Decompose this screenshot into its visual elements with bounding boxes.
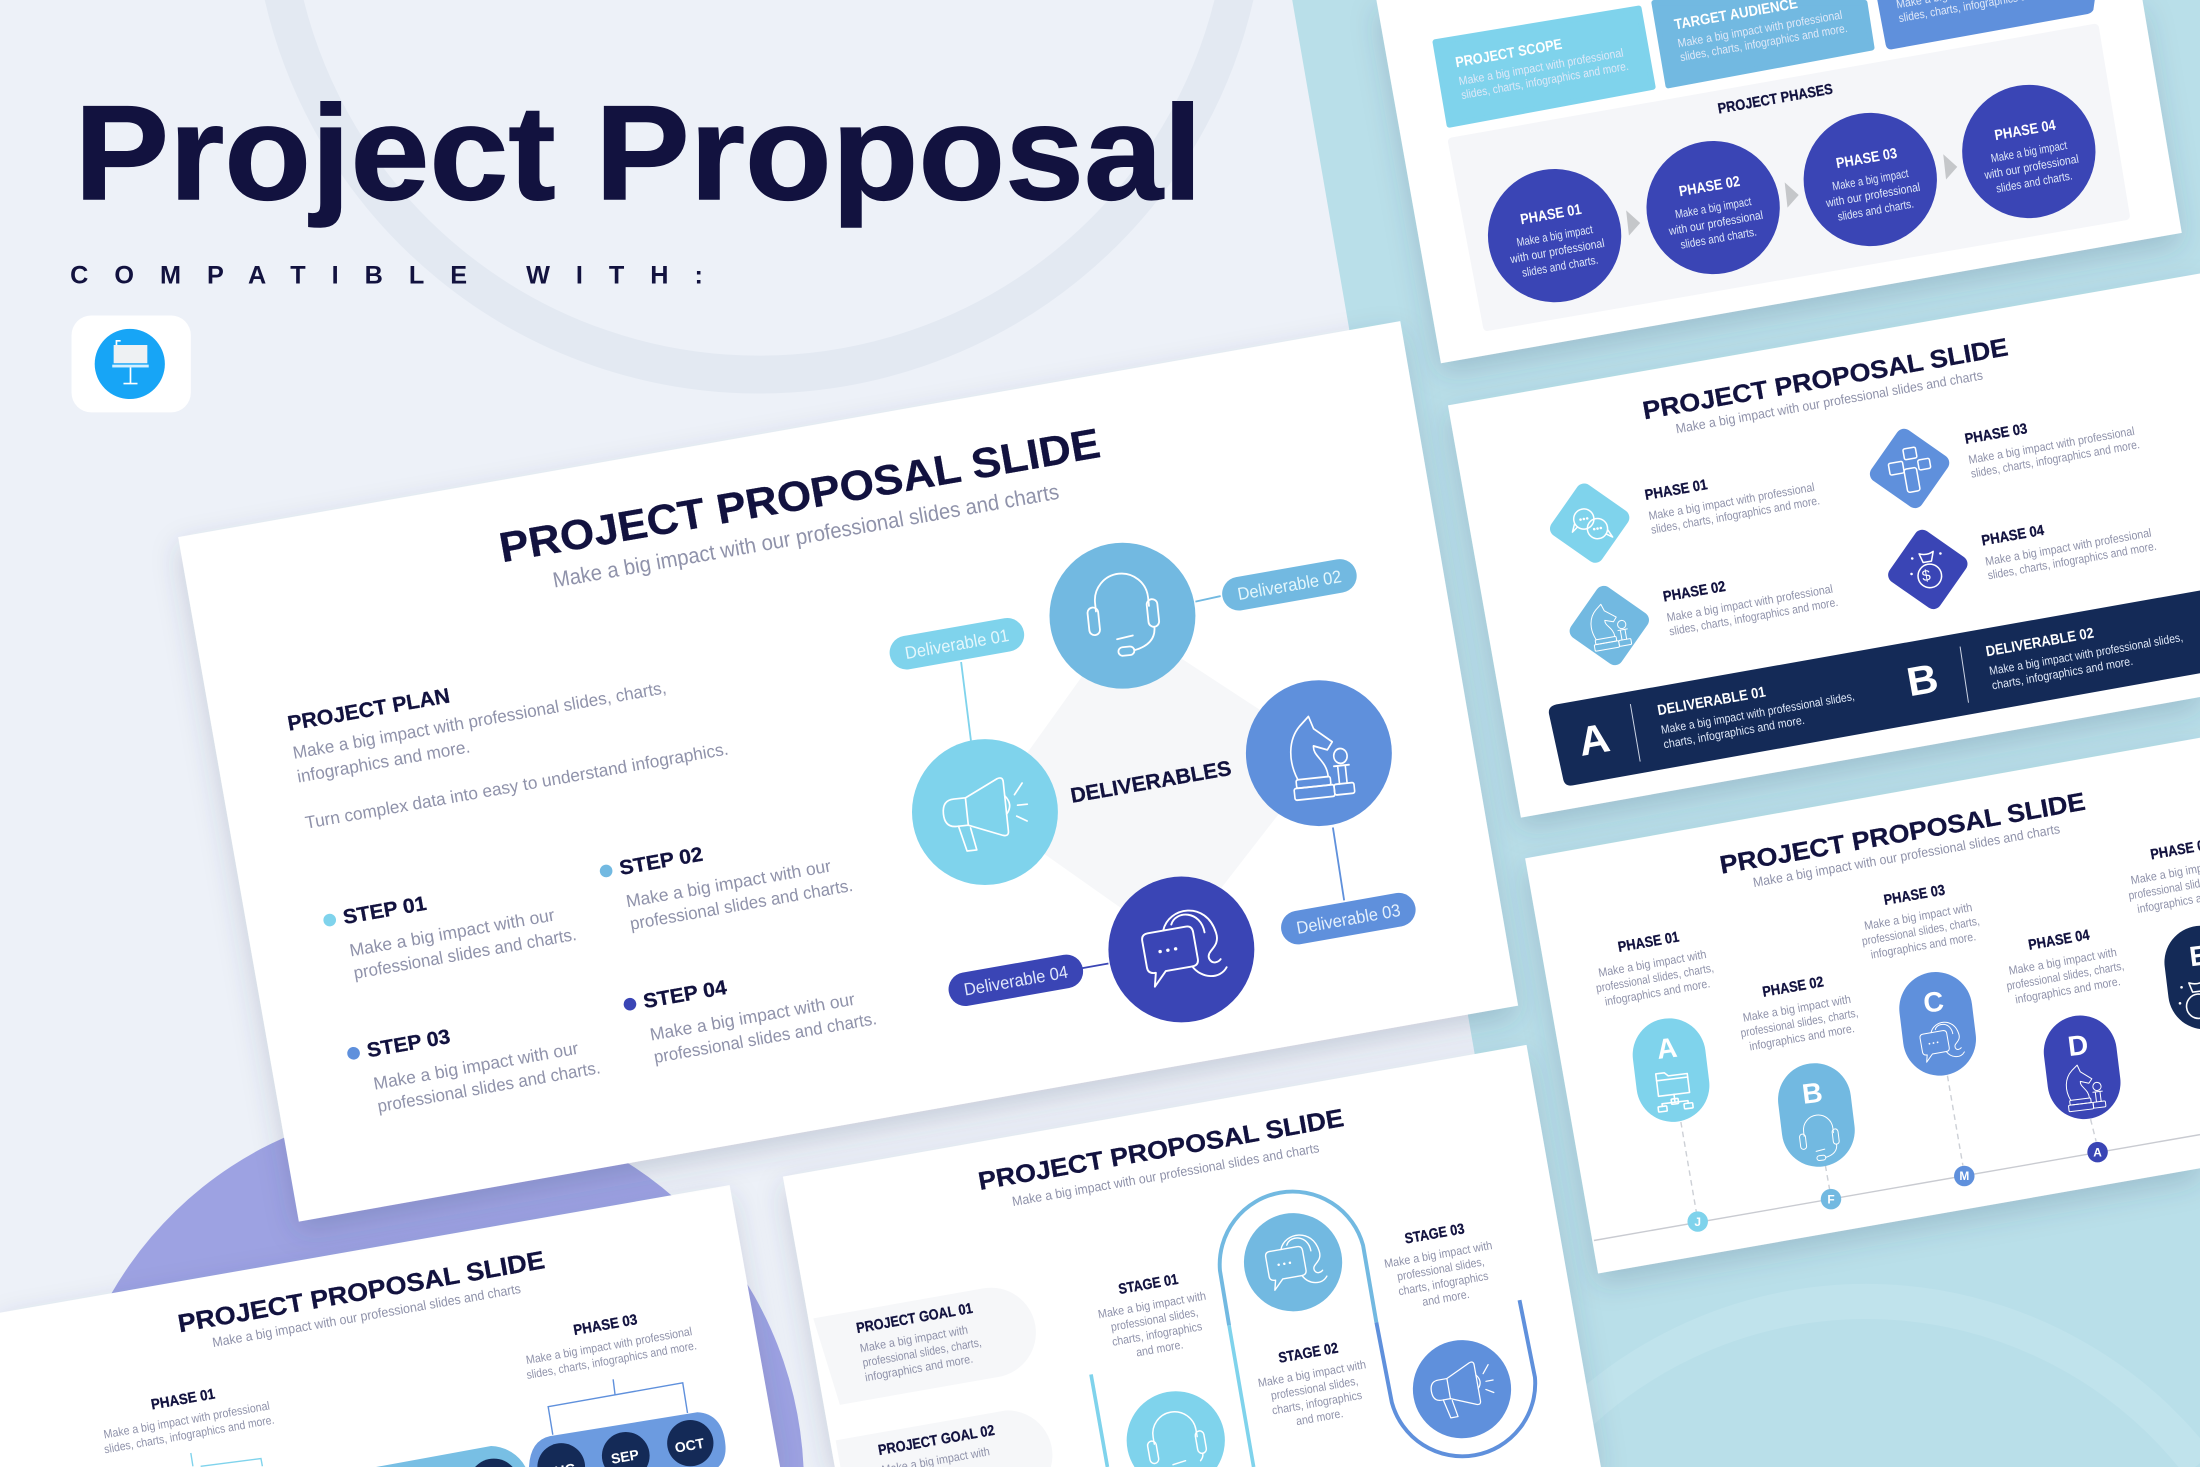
text: phase 03	[1964, 402, 2141, 481]
text: phase 03: PHASE 03	[1883, 883, 1946, 909]
text: phase 03: infographics and more.	[1870, 929, 1977, 962]
marker: F	[1821, 1189, 1841, 1209]
capsule: C: C	[1922, 985, 1945, 1019]
text: stage 01: and more.	[1135, 1337, 1184, 1360]
timeline axis	[1594, 1135, 2200, 1240]
bar: left segment	[376, 1446, 525, 1467]
marker: A	[2087, 1142, 2108, 1162]
icon: phase 04 diamond	[1885, 526, 1971, 612]
step 04: Make a big impact with our	[648, 989, 856, 1045]
capsule: D	[2040, 1011, 2125, 1123]
slide: timeline phases	[1525, 738, 2200, 1273]
phase 03: slides and charts.	[1836, 197, 1915, 224]
card: project scope	[1435, 8, 1653, 125]
phase 01: Make a big impact	[1515, 222, 1594, 249]
text: phase 01: PHASE 01	[1617, 930, 1680, 956]
text: stage 02: Make a big impact with	[1257, 1357, 1367, 1390]
text: stage 02: professional slides,	[1270, 1374, 1359, 1403]
label: deliverable 02	[1219, 556, 1359, 613]
arrow	[1785, 182, 1799, 208]
slide subtitle: Make a big impact with our professional slides and charts	[1752, 821, 2061, 890]
text: phase 04: slides, charts, infographics and more.	[1987, 539, 2158, 582]
step 03: Make a big impact with our	[372, 1038, 580, 1094]
decorative ring: bottom right	[1534, 1301, 2199, 1464]
marker: M: M	[1959, 1169, 1969, 1183]
icon: phase 02 diamond	[1566, 583, 1652, 668]
step 03: professional slides and charts.	[376, 1057, 602, 1116]
text: phase 01: Make a big impact with	[1597, 947, 1707, 980]
phase 01	[1477, 158, 1632, 313]
capsule: A	[1629, 1014, 1714, 1126]
icon: ear and chat	[1108, 877, 1254, 1022]
stage path: lower loop	[1376, 1300, 1535, 1456]
heading: deliverables: DELIVERABLES	[1069, 757, 1233, 808]
step 01: STEP 01	[341, 893, 428, 929]
panel: project goal 02: PROJECT GOAL 02	[877, 1423, 996, 1459]
card: target audience: slides, charts, infographics and more.	[1679, 21, 1849, 64]
panel: deliverables band: DELIVERABLE 02	[1985, 626, 2095, 660]
bar: months	[529, 1412, 726, 1467]
text: stage 01: STAGE 01	[1117, 1272, 1180, 1298]
phase 04: Make a big impact	[1990, 138, 2069, 165]
label: deliverable 04: Deliverable 04	[962, 962, 1070, 1000]
text: project plan	[286, 638, 730, 833]
phase 03: Make a big impact	[1831, 166, 1910, 193]
phase 03: PHASE 03	[1835, 146, 1898, 172]
card: third	[1877, 0, 2095, 49]
text: phase 03: Make a big impact with professional	[1967, 424, 2136, 467]
text: stage 03: STAGE 03	[1404, 1221, 1466, 1248]
text: phase 02: PHASE 02	[1761, 974, 1825, 1001]
bracket: phase 03	[548, 1379, 688, 1435]
slide heading: PROJECT PROPOSAL SLIDE	[976, 1104, 1346, 1196]
text: project plan: PROJECT PLAN	[286, 684, 452, 736]
text: phase 02	[1662, 560, 1839, 638]
text: phase 01: Make a big impact with professional	[1647, 480, 1816, 523]
label: deliverable 02: Deliverable 02	[1236, 566, 1343, 604]
text: stage 03: Make a big impact with	[1383, 1238, 1493, 1271]
slide: project scope and phases	[1376, 0, 2182, 363]
text: phase 01: infographics and more.	[1604, 976, 1711, 1009]
step 03: STEP 03	[365, 1026, 452, 1062]
text: phase 03: slides, charts, infographics and more.	[525, 1338, 698, 1382]
text: phase 02: PHASE 02	[1662, 579, 1727, 606]
text: stage 01: professional slides,	[1110, 1305, 1199, 1334]
text: phase 05	[2121, 832, 2200, 917]
step 04: professional slides and charts.	[652, 1008, 878, 1067]
heading: project phases: PROJECT PHASES	[1717, 82, 1834, 118]
text: stage 03: charts, infographics	[1397, 1269, 1489, 1298]
step 01: Make a big impact with our	[348, 905, 556, 960]
decorative circle: purple	[61, 1106, 804, 1467]
bar: months: SEP	[610, 1446, 640, 1467]
text: phase 04	[1999, 922, 2128, 1008]
panel: project goal 01: professional slides, charts,	[861, 1335, 983, 1370]
text: phase 04: infographics and more.	[2014, 974, 2121, 1007]
icon: megaphone	[912, 739, 1058, 885]
icon: stage 02 ear	[1236, 1205, 1350, 1319]
step 01	[322, 868, 578, 987]
text: phase 02: slides, charts, infographics and more.	[1668, 595, 1839, 638]
phase 02: with our professional	[1667, 208, 1764, 238]
panel: deliverables band	[1549, 590, 2200, 786]
capsule: E	[2160, 922, 2200, 1033]
text: phase 04: Make a big impact with	[2008, 945, 2118, 978]
capsule: D: D	[2066, 1029, 2090, 1062]
step 04: STEP 04	[642, 977, 729, 1013]
bracket: phase 01	[191, 1453, 262, 1466]
panel: deliverables band: DELIVERABLE 01	[1656, 684, 1767, 719]
text: stage 03: professional slides,	[1396, 1254, 1485, 1284]
step 02: professional slides and charts.	[628, 875, 854, 934]
text: phase 01: professional slides, charts,	[1595, 961, 1715, 995]
text: phase 01: PHASE 01	[150, 1386, 216, 1413]
icon: phase 04 diamond: $	[1921, 567, 1932, 585]
text: stage 02: and more.	[1295, 1406, 1344, 1428]
slide heading: PROJECT PROPOSAL SLIDE	[176, 1246, 547, 1338]
text: phase 03: Make a big impact with professional	[525, 1324, 693, 1367]
marker: A: A	[2093, 1145, 2102, 1159]
text: stage 01: charts, infographics	[1111, 1319, 1203, 1349]
text: phase 03	[1854, 878, 1983, 963]
text: phase 01: Make a big impact with professional	[103, 1398, 271, 1441]
panel: project goal 02	[836, 1410, 1052, 1467]
icon: stage 03 megaphone	[1405, 1332, 1519, 1446]
slide heading: PROJECT PROPOSAL SLIDE	[496, 419, 1104, 571]
phase 04: with our professional	[1982, 152, 2080, 182]
panel: deliverables band: charts, infographics and more.	[1991, 654, 2134, 692]
text: phase 03	[519, 1303, 698, 1382]
card: project scope: Make a big impact with professional	[1458, 45, 1624, 88]
background panel: light blue area	[1292, 0, 2200, 1467]
slide subtitle: Make a big impact with our professional slides and charts	[1011, 1140, 1321, 1209]
slide: stages and goals	[783, 1045, 1601, 1467]
text: phase 04	[1980, 504, 2158, 582]
step 01: professional slides and charts.	[352, 924, 578, 983]
text: phase 01: slides, charts, infographics and more.	[103, 1413, 275, 1456]
slide subtitle: Make a big impact with our professional slides and charts	[1675, 367, 1984, 436]
icon: stage 01 headset	[1127, 1391, 1225, 1467]
capsule: B	[1774, 1059, 1859, 1171]
text: project plan: Make a big impact with professional slides, charts,	[291, 677, 668, 763]
text: phase 04: professional slides, charts,	[2005, 959, 2125, 993]
text: phase 01	[1588, 925, 1717, 1010]
icon: headset	[1049, 543, 1195, 689]
text: stage 01	[1093, 1268, 1215, 1365]
phase 01: with our professional	[1508, 236, 1606, 266]
icon: keynote	[72, 316, 191, 412]
slide subtitle: Make a big impact with our professional slides and charts	[211, 1281, 522, 1350]
text: stage 02	[1253, 1336, 1375, 1434]
text: phase 03: professional slides, charts,	[1861, 914, 1981, 948]
icon: chess	[1246, 680, 1392, 826]
step 02: Make a big impact with our	[624, 856, 833, 911]
panel: deliverables band: A	[1575, 714, 1613, 765]
icon: phase 01 diamond	[1547, 480, 1633, 566]
text: phase 01: slides, charts, infographics and more.	[1650, 493, 1821, 537]
phase 02	[1636, 130, 1790, 285]
phase 04: slides and charts.	[1995, 168, 2073, 196]
arrow	[1943, 154, 1957, 180]
text: phase 01	[97, 1377, 275, 1456]
phase 02: PHASE 02	[1678, 174, 1741, 200]
text: phase 03: PHASE 03	[572, 1312, 639, 1339]
panel: gray phases background	[1452, 28, 2126, 327]
panel: deliverables band: charts, infographics and more.	[1662, 713, 1806, 751]
step 02	[598, 819, 854, 937]
step 03	[346, 1001, 602, 1120]
text: phase 02: professional slides, charts,	[1739, 1006, 1859, 1040]
label: deliverable 03: Deliverable 03	[1295, 900, 1402, 938]
text: phase 02	[1733, 969, 1862, 1055]
panel: project goal 01: PROJECT GOAL 01	[855, 1301, 974, 1337]
arrow	[1626, 210, 1640, 236]
dashed connectors	[1681, 1076, 2096, 1212]
text: project plan: infographics and more.	[295, 736, 472, 787]
capsule: B: B	[1800, 1077, 1824, 1110]
step 04	[622, 952, 878, 1071]
phase 02: slides and charts.	[1679, 225, 1758, 252]
slide: main deliverables	[178, 321, 1518, 1222]
panel: project goal 01	[813, 1281, 1043, 1407]
text: phase 01: PHASE 01	[1644, 477, 1709, 504]
stage path: arch	[1220, 1192, 1376, 1325]
label: deliverable 04	[946, 952, 1086, 1009]
marker: M	[1954, 1166, 1975, 1186]
text: phase 04: PHASE 04	[1980, 523, 2046, 550]
card: project scope: slides, charts, infographics and more.	[1460, 59, 1630, 102]
text: phase 04: Make a big impact with professional	[1984, 526, 2152, 569]
card: target audience	[1654, 0, 1872, 86]
panel: project goal 01: Make a big impact with	[859, 1323, 969, 1355]
text: phase 02: infographics and more.	[1748, 1021, 1856, 1053]
text: stage 02: STAGE 02	[1277, 1341, 1339, 1367]
slide subtitle: Make a big impact with our professional slides and charts	[551, 479, 1061, 593]
text: phase 02: Make a big impact with	[1742, 992, 1852, 1025]
text: phase 03: PHASE 03	[1964, 421, 2029, 448]
text: phase 01	[1644, 458, 1821, 537]
icon: phase 03 diamond	[1867, 425, 1953, 511]
title: Project Proposal	[74, 77, 1202, 228]
diagram: deliverables center	[985, 620, 1326, 947]
label: deliverable 01: Deliverable 01	[903, 625, 1010, 663]
marker: J: J	[1694, 1215, 1701, 1229]
phase 04: PHASE 04	[1993, 118, 2058, 144]
phase 03	[1793, 102, 1947, 257]
decorative ring: top	[281, 0, 1237, 375]
panel: deliverables band: B	[1903, 655, 1942, 705]
text: phase 02: Make a big impact with professional	[1666, 582, 1834, 625]
text: phase 03: slides, charts, infographics and more.	[1970, 437, 2141, 481]
slide: phases and deliverables	[1448, 273, 2200, 818]
phase 02: Make a big impact	[1674, 194, 1753, 221]
text: stage 01: Make a big impact with	[1097, 1289, 1207, 1321]
slide: bottom left phases	[0, 1185, 780, 1467]
text: stage 03	[1379, 1217, 1501, 1314]
subtitle: compatible with: COMPATIBLE WITH:	[70, 261, 703, 289]
step 02: STEP 02	[618, 844, 705, 880]
slide heading: PROJECT PROPOSAL SLIDE	[1641, 333, 2010, 425]
label: deliverable 01	[887, 615, 1027, 672]
stage path: light segments	[1091, 1325, 1254, 1467]
marker: J	[1687, 1211, 1708, 1232]
slide heading: PROJECT PROPOSAL SLIDE	[1718, 788, 2087, 880]
capsule: C	[1895, 968, 1980, 1080]
connector lines	[961, 596, 1344, 971]
marker: F: F	[1827, 1192, 1835, 1206]
text: stage 02: charts, infographics	[1271, 1388, 1363, 1418]
panel: project goal 01: infographics and more.	[864, 1352, 974, 1384]
text: phase 04: PHASE 04	[2027, 927, 2091, 954]
phase 01: slides and charts.	[1521, 253, 1599, 280]
panel: deliverables band: Make a big impact with professional slides,	[1660, 689, 1856, 737]
card: target audience: Make a big impact with professional	[1677, 8, 1843, 50]
phase 01: PHASE 01	[1519, 202, 1583, 228]
card: project scope: PROJECT SCOPE	[1454, 37, 1564, 71]
phase 04	[1952, 74, 2106, 229]
label: deliverable 03	[1278, 890, 1418, 947]
phase 03: with our professional	[1824, 180, 1921, 210]
text: project plan: Turn complex data into easy to understand infographics.	[304, 738, 730, 833]
bar: months: OCT	[673, 1435, 706, 1456]
capsule: A: A	[1655, 1032, 1679, 1065]
text: phase 03: Make a big impact with	[1863, 900, 1973, 933]
text: stage 03: and more.	[1421, 1287, 1471, 1309]
